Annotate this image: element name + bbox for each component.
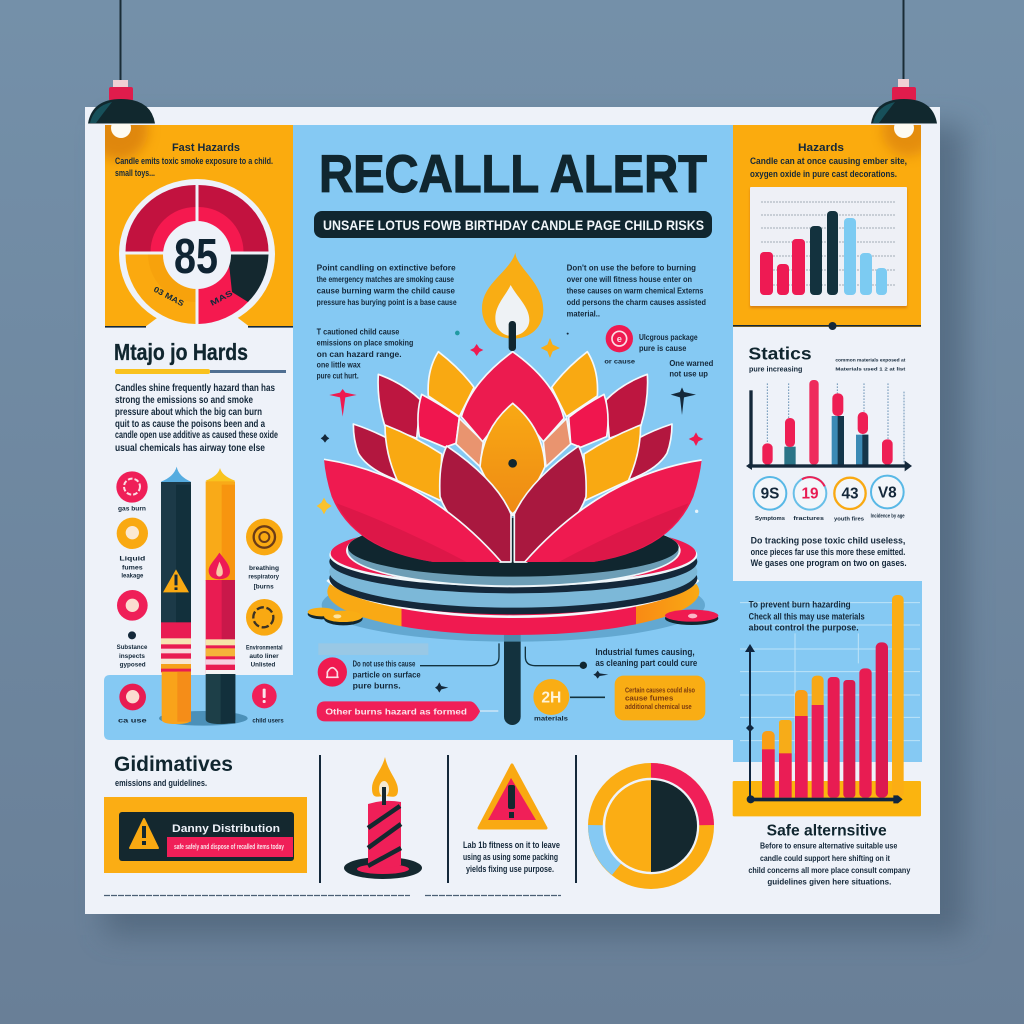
text block: upper right: Don't on use the before to burning — [567, 263, 696, 273]
icon: orange circle right 1 with label — [246, 519, 283, 590]
stat labels: youth fires — [834, 517, 864, 523]
pill label — [317, 701, 480, 721]
icon: exclamation circle with label: child users — [252, 718, 284, 724]
far back petals — [353, 352, 672, 481]
gauge value: 85 — [174, 229, 218, 284]
text block: major hazards: usual chemicals has airway tone else — [115, 443, 265, 454]
text block: upper right — [567, 263, 706, 318]
lamp: left — [88, 0, 155, 138]
dashed guides — [767, 383, 904, 463]
icon: flame on candle — [209, 553, 230, 579]
warning icon — [130, 819, 158, 848]
icon: orange circle right 1 with label: respiratory — [248, 574, 279, 581]
icon: red circle 3 with label: ca use — [118, 718, 148, 724]
text block: upper left: pressure has burying point is a base cause — [317, 297, 457, 307]
warning label — [104, 797, 307, 873]
centre dot — [508, 459, 517, 468]
central lotus illustration — [308, 253, 718, 725]
gauge text: small toys... — [115, 168, 155, 179]
safe alternative text — [748, 841, 911, 886]
icon: red alert with note — [604, 325, 713, 379]
lollipop chart — [762, 380, 893, 465]
stat labels: fractures — [793, 516, 824, 522]
lamp glow on right panel — [879, 125, 921, 159]
lamp glow on panel — [105, 125, 152, 164]
divider with dot — [733, 325, 921, 327]
gauge chart — [119, 179, 275, 329]
large outer petals — [324, 459, 702, 562]
statistics text — [751, 535, 907, 568]
right panel text: Candle can at once causing ember site, — [750, 156, 907, 167]
right panel text: oxygen oxide in pure cast decorations. — [750, 169, 897, 180]
stat circles: 19 — [801, 486, 819, 503]
statistics text: Do tracking pose toxic child useless, — [751, 535, 905, 545]
statistics heading: Statics — [748, 343, 812, 363]
sparkles — [317, 331, 703, 514]
candle: dark — [161, 467, 191, 724]
white base under gauge — [145, 312, 250, 327]
pedestal — [308, 514, 718, 642]
icon: red circle 2 with label: inspects — [119, 653, 145, 660]
chart text: about control the purpose. — [749, 623, 859, 633]
callout: lower right — [533, 647, 705, 722]
chart text — [749, 600, 865, 633]
icon: orange circle 1 with label: Liquid — [119, 556, 145, 563]
alternatives bar chart — [762, 595, 904, 798]
icon: warning triangle — [479, 765, 546, 828]
gauge text — [115, 156, 273, 179]
centre crimson petal — [461, 352, 564, 442]
text block: upper left: the emergency matches are smoking cause — [317, 274, 454, 284]
chart axes — [746, 390, 912, 471]
chart axes — [745, 644, 903, 803]
callout: lower right: Industrial fumes causing, — [595, 647, 695, 657]
stat labels: Symptoms — [755, 516, 785, 522]
icon: orange circle 1 with label — [117, 518, 148, 580]
callout: lower right: 2H — [541, 690, 561, 707]
callout: lower right: cause fumes — [625, 696, 673, 703]
statistics text: once pieces far use this more these emitted. — [751, 547, 905, 557]
icon: red alert with note: One warned — [669, 359, 713, 368]
text block: major hazards: quit to as cause the poisons been and a — [115, 419, 265, 430]
icon: red circle 3 with label — [118, 684, 148, 724]
icon: striped candle — [344, 757, 422, 879]
bar chart card — [750, 187, 907, 306]
stat circles: 43 — [841, 486, 859, 503]
callout: lower right: materials — [534, 715, 568, 722]
icon: orange circle 1 with label: leakage — [121, 573, 144, 580]
icon: red circle 1 with label: gas burn — [118, 507, 146, 513]
statistics text: We gases one program on two on gases. — [751, 558, 907, 568]
inner side petals — [418, 394, 608, 467]
statistics note: Materials used 1 2 at list — [835, 367, 906, 372]
icon: orange circle 1 with label: fumes — [122, 564, 143, 571]
text block: major hazards: pressure about which the big can burn — [115, 407, 262, 418]
callout: lower right: as cleaning part could cure — [595, 658, 697, 668]
poster shadow — [105, 125, 965, 935]
flame — [482, 253, 543, 351]
icon: orange circle right 1 with label: [burns — [254, 583, 274, 590]
icon: orange circle right 1 with label: breathing — [249, 565, 279, 572]
pill label: Other burns hazard as formed — [325, 707, 467, 716]
gauge text: Candle emits toxic smoke exposure to a child. — [115, 156, 273, 167]
icon: orange circle right 2 with label: Unlisted — [251, 662, 275, 669]
text block: major hazards — [115, 383, 278, 454]
icon: warning on candle — [163, 569, 189, 592]
text block: middle left: one little wax — [317, 360, 361, 370]
candle: orange and red — [206, 468, 235, 724]
gauge chart: 03 MAS — [152, 285, 186, 309]
safe alternative text: Before to ensure alternative suitable use — [760, 841, 898, 851]
text block: upper right: material.. — [567, 308, 600, 318]
grid lines — [740, 603, 920, 753]
candles infographic — [116, 467, 284, 726]
callout: lower right: additional chemical use — [625, 704, 692, 711]
warning text: using as using some packing — [463, 852, 558, 863]
icon: red circle 2 with label: gyposed — [120, 662, 146, 669]
text block: middle left: on can hazard range. — [317, 349, 402, 359]
text block: upper left — [317, 263, 457, 307]
panel: right orange chart — [733, 125, 921, 330]
text block: middle left — [317, 326, 413, 381]
text block: upper right: these causes on warm chemical Externs — [567, 286, 703, 296]
main title: RECALLL ALERT — [319, 144, 707, 204]
stat labels — [755, 513, 905, 523]
warning title: Danny Distribution — [172, 823, 280, 835]
lotus petals — [324, 352, 702, 562]
safe alternative text: guidelines given here situations. — [767, 876, 891, 886]
text block: major hazards: candle open use additive as caused these oxide — [115, 430, 278, 441]
heading: guidelines and alternatives: Gidimatives — [114, 753, 233, 776]
icon: red alert with note: Ulcgrous package — [639, 333, 698, 342]
icon: red circle 2 with label: Substance — [117, 644, 148, 651]
warning text: Lab 1b fitness on it to leave — [463, 840, 560, 851]
stat circles: 9S — [761, 486, 779, 503]
statistics note: common materials exposed at — [835, 357, 906, 362]
panel: left orange gauge — [105, 125, 293, 328]
text block: major hazards: strong the emissions so and smoke — [115, 395, 253, 406]
panel: central blue — [104, 125, 922, 762]
dark crimson petals — [440, 446, 586, 562]
icon: red alert with note: pure is cause — [639, 344, 687, 353]
icon: exclamation circle with label — [252, 684, 284, 724]
stem and connectors — [420, 623, 605, 725]
icon: red alert with note: e — [617, 334, 622, 344]
warning text — [463, 840, 560, 875]
donut chart — [588, 763, 714, 889]
subheading: emissions and guidelines. — [115, 778, 207, 788]
shadow — [159, 711, 248, 726]
callout: lower left: Do not use this cause — [353, 658, 416, 668]
chart text: To prevent burn hazarding — [749, 600, 851, 610]
text block: upper left: Point candling on extinctive before — [317, 263, 456, 273]
callout: lower left: particle on surface — [353, 670, 421, 680]
icon: orange circle right 2 with label: auto liner — [249, 653, 279, 660]
subtitle banner: UNSAFE LOTUS FOWB BIRTHDAY CANDLE PAGE CHILD RISKS — [323, 217, 704, 233]
text block: middle left: T cautioned child cause — [317, 326, 399, 336]
stat labels: Incidence by age — [871, 513, 905, 519]
bottom footnotes — [104, 894, 561, 896]
text block: middle left: emissions on place smoking — [317, 338, 413, 348]
panel: statistics — [746, 343, 912, 568]
text block: upper left: cause burning warm the child cause — [317, 286, 455, 296]
safe alternative text: child concerns all more place consult company — [748, 865, 911, 875]
subtitle banner — [314, 211, 712, 238]
stat circles — [754, 476, 904, 510]
lamp: right — [871, 0, 937, 138]
callout: lower left: pure burns. — [353, 681, 401, 691]
text block: upper right: over one will fitness house enter on — [567, 274, 692, 284]
statistics subheading: pure increasing — [749, 365, 803, 374]
right panel heading: Hazards — [798, 142, 844, 154]
icon: orange circle right 2 with label — [246, 599, 283, 669]
text block: upper right: odd persons the charm causes assisted — [567, 297, 706, 307]
heading: safe alternative: Safe alternsitive — [767, 822, 887, 839]
safe alternative text: candle could support here shifting on it — [760, 853, 890, 863]
bars — [760, 211, 887, 295]
text block: middle left: pure cut hurt. — [317, 371, 359, 381]
stat circles: V8 — [878, 485, 897, 502]
warning red strip — [167, 837, 293, 857]
icon: red circle 1 with label — [116, 471, 148, 513]
dividers — [320, 755, 576, 883]
heading: major hazards: Mtajo jo Hards — [114, 339, 248, 365]
red pebbles — [665, 610, 718, 625]
warning label: safe safely and dispose of recalled items today — [174, 844, 284, 851]
icon: red alert with note: not use up — [669, 370, 708, 379]
icon: orange circle right 2 with label: Environmental — [246, 644, 283, 651]
centre orange petal — [480, 403, 545, 514]
icon: red alert with note: or cause — [604, 358, 635, 365]
orange pebbles — [308, 608, 363, 625]
statistics note — [835, 357, 906, 372]
panel: safe alternative chart — [733, 595, 921, 886]
gauge chart: MAS — [209, 288, 235, 308]
gauge heading: Fast Hazards — [172, 142, 240, 154]
poster — [85, 100, 940, 914]
callout: lower right: Certain causes could also — [625, 687, 695, 694]
orange lower petals — [385, 425, 641, 501]
icon: red circle 2 with label — [117, 590, 148, 669]
callout: lower left — [318, 643, 448, 693]
subheading strip — [115, 369, 286, 374]
orange base band — [733, 781, 921, 816]
right panel text — [750, 156, 907, 180]
warning text: yields fixing use purpose. — [466, 864, 554, 875]
chart text: Check all this may use materials — [749, 611, 865, 621]
text block: major hazards: Candles shine frequently hazard than has — [115, 383, 275, 394]
